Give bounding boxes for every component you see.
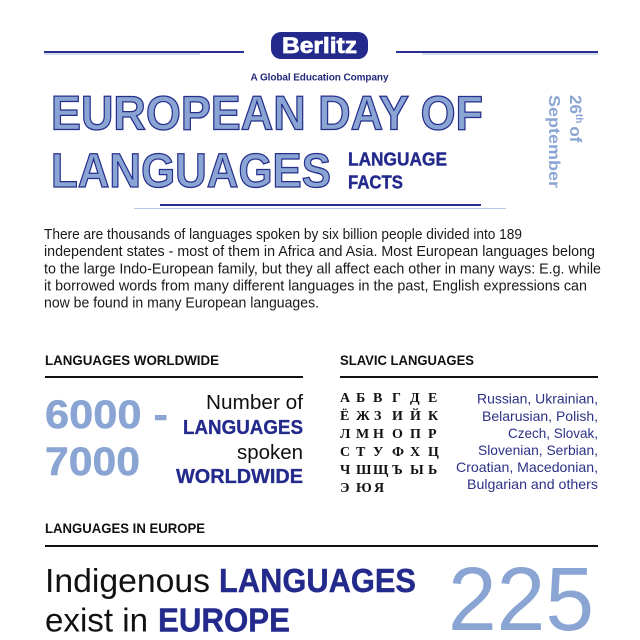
label: number of languages spoken worldwide: WORLDWIDE <box>176 466 303 488</box>
cyrillic alphabet: З <box>374 409 381 424</box>
title: EUROPEAN DAY OF <box>51 88 483 140</box>
list of slavic languages: Czech, Slovak, <box>508 425 598 441</box>
logo: Berlitz: Berlitz <box>282 33 357 58</box>
cyrillic alphabet: В <box>373 391 382 406</box>
number: 6000-7000 <box>45 393 168 484</box>
label: number of languages spoken worldwide: spoken <box>237 442 303 464</box>
subtitle: language facts <box>348 150 447 192</box>
heading: languages in europe: LANGUAGES IN EUROPE <box>45 520 205 536</box>
statement: indigenous languages exist in europe: Indigenous <box>45 562 210 599</box>
logo: Berlitz <box>271 32 368 59</box>
intro paragraph: There are thousands of languages spoken by six billion people divided into 189 <box>44 227 522 243</box>
subtitle: language facts: LANGUAGE <box>348 150 447 170</box>
tagline: A Global Education Company <box>250 72 389 84</box>
label: number of languages spoken worldwide: LANGUAGES <box>183 417 303 439</box>
date: 26th of September: of <box>566 126 585 143</box>
cyrillic alphabet: Г <box>392 391 401 406</box>
cyrillic alphabet: Ж <box>356 409 370 424</box>
heading: languages worldwide: LANGUAGES WORLDWIDE <box>45 352 219 368</box>
cyrillic alphabet: У <box>373 445 383 460</box>
number: 6000-7000: 6000 - <box>45 393 168 437</box>
date: 26th of September <box>545 95 585 188</box>
label: number of languages spoken worldwide: Number of <box>206 392 303 414</box>
list of slavic languages: Belarusian, Polish, <box>482 408 598 424</box>
title <box>51 88 483 198</box>
list of slavic languages: Croatian, Macedonian, <box>456 459 598 475</box>
heading: slavic languages: SLAVIC LANGUAGES <box>340 352 474 368</box>
statement: indigenous languages exist in europe <box>45 562 416 638</box>
intro paragraph: it borrowed words from many different languages in the past, English expressions can <box>44 278 587 294</box>
cyrillic alphabet: К <box>428 409 439 424</box>
cyrillic alphabet: Е <box>428 391 437 406</box>
statement: indigenous languages exist in europe: LANGUAGES <box>219 562 416 599</box>
statement: indigenous languages exist in europe: exist in <box>45 602 148 638</box>
cyrillic alphabet: Х <box>410 445 420 460</box>
cyrillic alphabet: Ш <box>356 463 372 478</box>
cyrillic alphabet: Ч <box>340 463 351 478</box>
statement: indigenous languages exist in europe: EUROPE <box>158 602 290 638</box>
cyrillic alphabet: О <box>392 427 403 442</box>
date: 26th of September: 26 <box>566 95 585 114</box>
cyrillic alphabet <box>340 391 439 496</box>
number: 6000-7000: 7000 <box>45 440 140 484</box>
cyrillic alphabet: П <box>410 427 421 442</box>
cyrillic alphabet: Э <box>340 481 350 496</box>
list of slavic languages <box>456 390 598 492</box>
cyrillic alphabet: Н <box>373 427 384 442</box>
cyrillic alphabet: Ю <box>356 481 372 496</box>
title: LANGUAGES <box>51 145 331 198</box>
intro paragraph: to the large Indo-European family, but they all affect each other in many ways: E.g. while <box>44 262 601 278</box>
list of slavic languages: Bulgarian and others <box>467 476 598 492</box>
date: 26th of September: September <box>545 95 562 188</box>
label: number of languages spoken worldwide <box>176 392 303 488</box>
cyrillic alphabet: Б <box>356 391 365 406</box>
list of slavic languages: Russian, Ukrainian, <box>477 390 598 406</box>
panel: languages in europe <box>45 520 598 640</box>
panel: languages worldwide <box>45 352 303 488</box>
cyrillic alphabet: Ъ <box>392 463 403 478</box>
cyrillic alphabet: Ц <box>428 445 439 460</box>
cyrillic alphabet: Ф <box>392 445 404 460</box>
cyrillic alphabet: Й <box>410 407 421 424</box>
intro paragraph: independent states - most of them in Africa and Asia. Most European languages belong <box>44 244 595 260</box>
cyrillic alphabet: Я <box>374 481 384 496</box>
subtitle: language facts: FACTS <box>348 172 403 192</box>
panel: slavic languages <box>340 352 598 496</box>
date: 26th of September: th <box>573 114 584 123</box>
cyrillic alphabet: Ы <box>410 463 424 478</box>
cyrillic alphabet: С <box>340 445 350 460</box>
intro paragraph <box>44 227 601 312</box>
cyrillic alphabet: Ь <box>428 463 437 478</box>
cyrillic alphabet: Д <box>410 391 420 406</box>
cyrillic alphabet: Т <box>356 445 366 460</box>
cyrillic alphabet: А <box>340 391 351 406</box>
cyrillic alphabet: М <box>356 427 369 442</box>
list of slavic languages: Slovenian, Serbian, <box>478 442 598 458</box>
cyrillic alphabet: Р <box>428 427 437 442</box>
cyrillic alphabet: Л <box>340 427 351 442</box>
intro paragraph: now be found in many European languages. <box>44 296 319 312</box>
cyrillic alphabet: Щ <box>373 463 389 478</box>
cyrillic alphabet: Ё <box>340 408 349 424</box>
cyrillic alphabet: И <box>392 409 403 424</box>
